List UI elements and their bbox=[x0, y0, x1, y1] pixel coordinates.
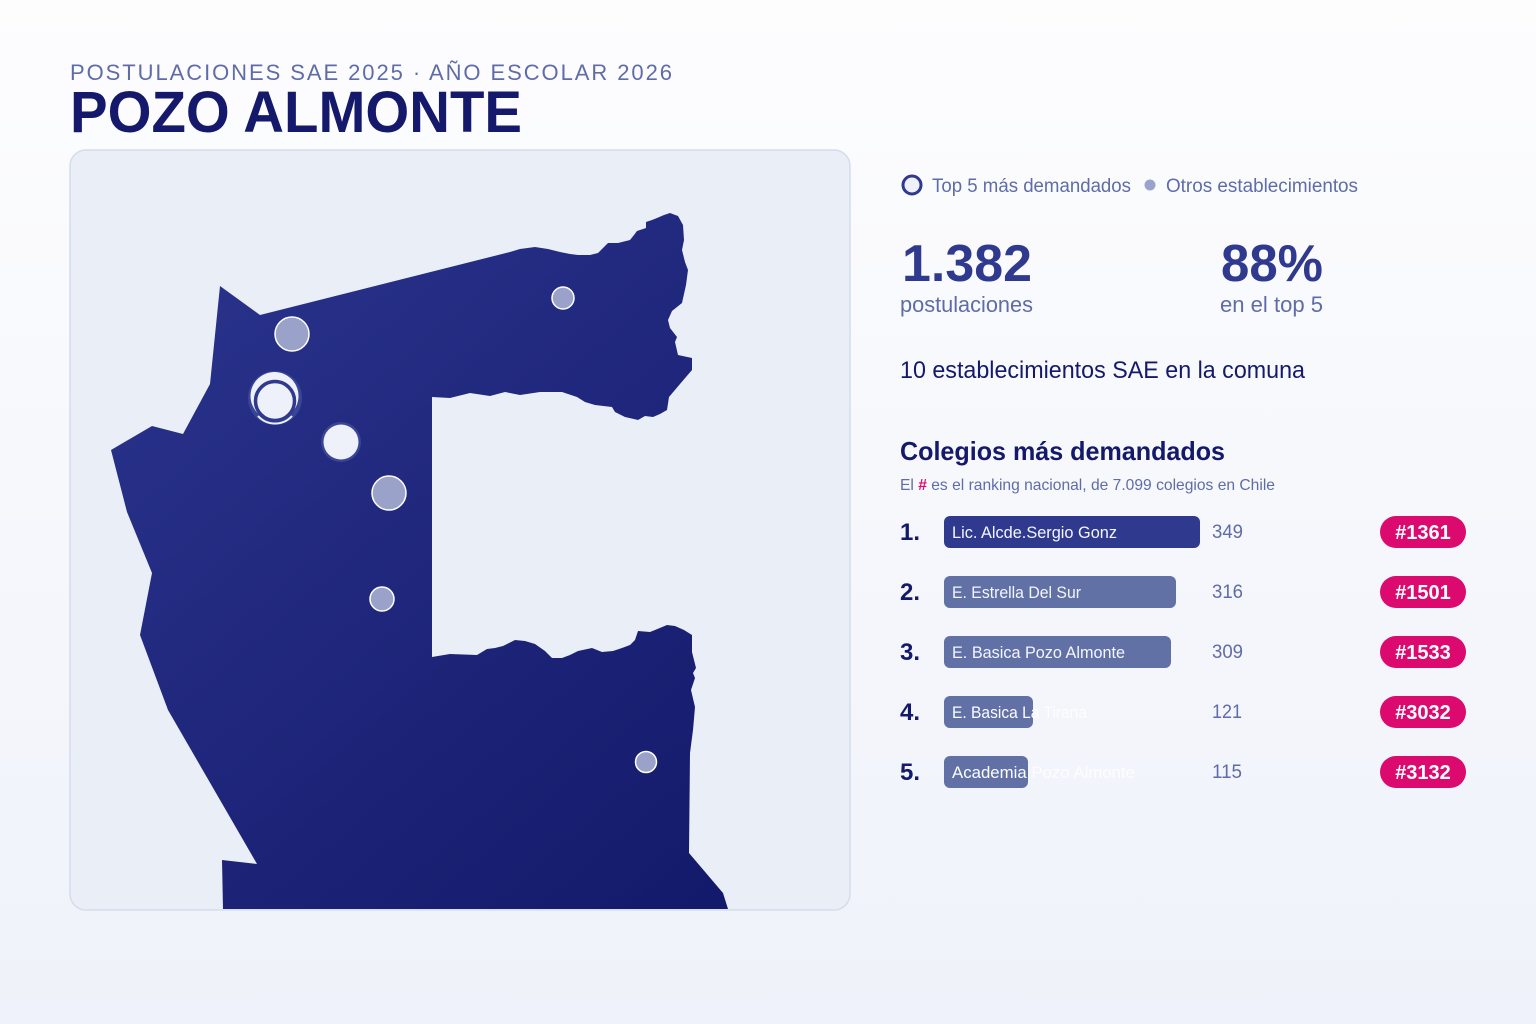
row 3: #1533 bbox=[1395, 642, 1451, 664]
row 3: 309 bbox=[1212, 642, 1243, 663]
row 3: 3. bbox=[900, 639, 920, 666]
row 2: E. Estrella Del Sur bbox=[952, 583, 1081, 602]
marker: other school NE bbox=[552, 287, 574, 309]
stat: applications: postulaciones bbox=[900, 292, 1033, 317]
map background bbox=[70, 150, 850, 910]
stat: applications: 1.382 bbox=[902, 235, 1032, 293]
row 4: 4. bbox=[900, 699, 920, 726]
stat: top 5 share: 88% bbox=[1221, 235, 1323, 293]
row 1: #1361 bbox=[1395, 522, 1451, 544]
row 5: 115 bbox=[1212, 762, 1242, 783]
row 1: 1. bbox=[900, 519, 920, 546]
row 1 bbox=[900, 516, 1466, 548]
row 4 bbox=[900, 696, 1466, 728]
stat: applications bbox=[900, 235, 1033, 317]
row 4: #3032 bbox=[1395, 702, 1451, 724]
legend bbox=[903, 176, 1358, 197]
marker: other school south bbox=[370, 587, 394, 611]
text: school count: 10 establecimientos SAE en la comuna bbox=[900, 357, 1306, 384]
subtitle: POSTULACIONES SAE 2025 · AÑO ESCOLAR 2026 bbox=[70, 60, 672, 85]
row 2: 316 bbox=[1212, 582, 1243, 603]
row 5 bbox=[900, 756, 1466, 788]
row 4: 121 bbox=[1212, 702, 1242, 723]
row 2: #1501 bbox=[1395, 582, 1451, 604]
row 5: Academia Pozo Almonte bbox=[952, 763, 1135, 782]
title: POZO ALMONTE bbox=[70, 80, 522, 145]
marker: other school NW bbox=[275, 317, 309, 351]
marker: other school SE bbox=[636, 752, 656, 772]
legend: top 5 label: Top 5 más demandados bbox=[932, 176, 1131, 197]
note: ranking: El # es el ranking nacional, de 7.099 colegios en Chile bbox=[900, 477, 1275, 494]
row 1: Lic. Alcde.Sergio Gonz bbox=[952, 523, 1117, 542]
stat: top 5 share bbox=[1220, 235, 1323, 317]
panel: map bbox=[70, 150, 850, 910]
marker: other school centre bbox=[372, 476, 406, 510]
marker: top schools cluster bbox=[248, 371, 302, 425]
legend: top 5 icon bbox=[903, 176, 921, 194]
row 5: 5. bbox=[900, 759, 920, 786]
row 1: 349 bbox=[1212, 522, 1243, 543]
row 5: #3132 bbox=[1395, 762, 1451, 784]
row 3: E. Basica Pozo Almonte bbox=[952, 643, 1125, 662]
row 3 bbox=[900, 636, 1466, 668]
marker: top school bbox=[321, 422, 361, 462]
row 4: E. Basica La Tirana bbox=[952, 703, 1087, 722]
header bbox=[70, 60, 672, 145]
row 2: 2. bbox=[900, 579, 920, 606]
legend: others icon bbox=[1144, 180, 1156, 190]
row 2 bbox=[900, 576, 1466, 608]
map: commune shape bbox=[111, 213, 728, 909]
stat: top 5 share: en el top 5 bbox=[1220, 292, 1323, 317]
heading: most demanded: Colegios más demandados bbox=[900, 436, 1225, 466]
legend: others label: Otros establecimientos bbox=[1166, 176, 1358, 197]
